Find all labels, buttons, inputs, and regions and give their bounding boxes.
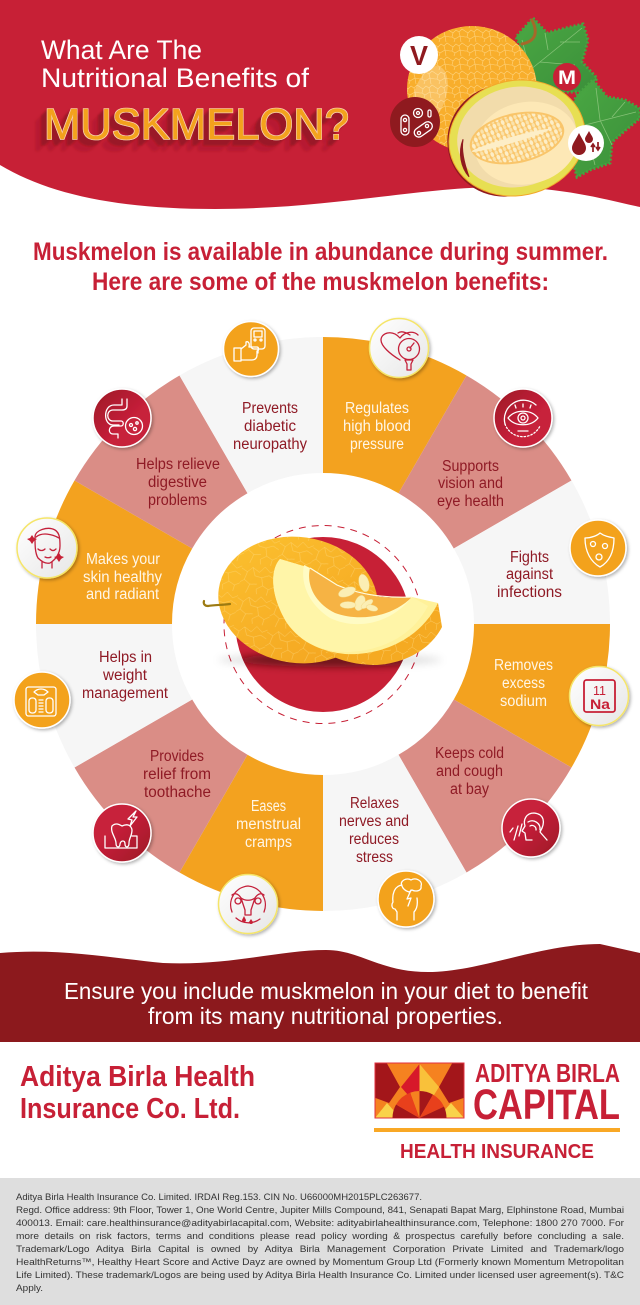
company name: Insurance Co. Ltd. bbox=[20, 1093, 240, 1125]
segment: supports vision and eye health: vision and bbox=[438, 475, 503, 492]
title: MUSKMELON? bbox=[44, 100, 349, 149]
segment: makes your skin healthy and radiant: skin healthy bbox=[83, 569, 162, 586]
cut melon bbox=[436, 67, 597, 209]
segment: helps in weight management: management bbox=[82, 685, 169, 702]
segment: keeps cold and cough at bay: and cough bbox=[436, 763, 503, 780]
closing banner bbox=[0, 944, 640, 1042]
segment: provides relief from toothache bbox=[74, 700, 248, 872]
segment: removes excess sodium: sodium bbox=[500, 693, 547, 710]
segment: makes your skin healthy and radiant: and radiant bbox=[86, 586, 160, 603]
segment: relaxes nerves and reduces stress: stress bbox=[356, 849, 393, 866]
icon: glucose meter bbox=[224, 322, 278, 376]
soft ground shadow outside disc bbox=[218, 654, 442, 666]
segment: eases menstrual cramps: menstrual bbox=[236, 816, 301, 833]
icon: cough bbox=[502, 799, 560, 857]
title: What Are The bbox=[41, 35, 202, 65]
segment: relaxes nerves and reduces stress bbox=[323, 755, 466, 911]
segment: regulates high blood pressure bbox=[323, 337, 466, 493]
legal disclaimer: Life Limited). These trademark/Logos are being used by Aditya Birla Health Insurance Co. Limited under licensed user agreement(s). T&C bbox=[16, 1270, 624, 1281]
segment: helps relieve digestive problems: problems bbox=[148, 492, 207, 509]
red disc bbox=[236, 537, 410, 712]
logo mark bbox=[375, 1063, 464, 1118]
icon: sodium: Na bbox=[590, 696, 610, 712]
legal disclaimer: more details on risk factors, terms and conditions please read policy wording & prospectus carefully before concluding a sale. bbox=[16, 1231, 624, 1242]
segment: eases menstrual cramps: Eases bbox=[251, 798, 286, 815]
intro heading: Here are some of the muskmelon benefits: bbox=[92, 268, 549, 296]
segment: eases menstrual cramps: cramps bbox=[245, 834, 292, 851]
benefits wheel bbox=[36, 337, 610, 911]
whole melon bbox=[406, 20, 537, 152]
segment: prevents diabetic neuropathy: diabetic bbox=[244, 418, 296, 435]
segment: helps relieve digestive problems: Helps relieve bbox=[136, 456, 220, 473]
icon: stressed head bbox=[378, 871, 434, 927]
segment: eases menstrual cramps bbox=[180, 755, 323, 911]
segment: fights against infections bbox=[454, 480, 610, 624]
segment: prevents diabetic neuropathy: neuropathy bbox=[233, 436, 307, 453]
logo bbox=[374, 1058, 620, 1163]
icon: blood pressure heart bbox=[370, 318, 428, 378]
dashed ring bbox=[224, 526, 422, 724]
leaf: lower bbox=[570, 80, 640, 177]
legal disclaimer: HealthReturns™, Healthy Heart Score and Active Dayz are owned by Momentum Group Ltd (Formerly known Momentum Metropolitan bbox=[16, 1257, 624, 1268]
segment: regulates high blood pressure: pressure bbox=[350, 436, 404, 453]
segment: supports vision and eye health: Supports bbox=[442, 458, 499, 475]
segment: provides relief from toothache: relief from bbox=[143, 766, 211, 783]
icon: sodium bbox=[570, 666, 628, 726]
melon shadow on disc bbox=[235, 653, 435, 667]
segment: makes your skin healthy and radiant: Makes your bbox=[86, 551, 160, 568]
closing banner: from its many nutritional properties. bbox=[148, 1003, 503, 1029]
segment: supports vision and eye health: eye health bbox=[437, 493, 504, 510]
centre melon illustration bbox=[204, 526, 442, 724]
segment: keeps cold and cough at bay bbox=[398, 700, 572, 872]
segment: relaxes nerves and reduces stress: nerves and bbox=[339, 813, 409, 830]
segment: provides relief from toothache: toothache bbox=[144, 784, 211, 801]
icon: weighing scale bbox=[14, 672, 70, 728]
legal disclaimer: Apply. bbox=[16, 1283, 43, 1294]
icon: sodium: 11 bbox=[593, 683, 606, 698]
header red wave bbox=[0, 0, 640, 209]
badge: germs bbox=[390, 97, 440, 147]
title: Nutritional Benefits of bbox=[41, 63, 310, 93]
whole melon bbox=[204, 526, 386, 674]
segment: provides relief from toothache: Provides bbox=[150, 748, 204, 765]
segment: fights against infections: Fights bbox=[510, 549, 549, 566]
segment: makes your skin healthy and radiant bbox=[36, 480, 192, 624]
segment: keeps cold and cough at bay: Keeps cold bbox=[435, 745, 504, 762]
badge: M: M bbox=[558, 68, 576, 89]
segment: regulates high blood pressure: high blood bbox=[343, 418, 411, 435]
segment: removes excess sodium bbox=[454, 624, 610, 768]
icon: shield bbox=[570, 520, 626, 576]
segment: relaxes nerves and reduces stress: reduces bbox=[349, 831, 399, 848]
legal disclaimer: 400013. Email: care.healthinsurance@adityabirlacapital.com, Website: adityabirlahealthinsurance.com, Telephone: 1800 270 7000. For bbox=[16, 1218, 624, 1229]
header melon illustration bbox=[390, 18, 640, 209]
logo: HEALTH INSURANCE bbox=[400, 1140, 594, 1163]
segment: helps in weight management: weight bbox=[102, 667, 148, 684]
legal disclaimer: Regd. Office address: 9th Floor, Tower 1, One World Centre, Jupiter Mills Compound, 841, Senapati Bapat Marg, Elphinstone Road, Mumbai bbox=[16, 1205, 624, 1216]
segment: removes excess sodium: Removes bbox=[494, 657, 553, 674]
segment: fights against infections: infections bbox=[497, 584, 562, 601]
segment: helps in weight management: Helps in bbox=[99, 649, 152, 666]
legal disclaimer bbox=[0, 1178, 640, 1305]
segment: regulates high blood pressure: Regulates bbox=[345, 400, 409, 417]
leaf: upper bbox=[516, 18, 597, 92]
badge: V bbox=[400, 36, 438, 74]
badge: V: V bbox=[410, 40, 428, 71]
badge: M bbox=[553, 63, 581, 91]
segment: fights against infections: against bbox=[506, 566, 554, 583]
legal disclaimer: Trademark/Logo Aditya Birla Capital is owned by Aditya Birla Management Corporation Private Limited and Trademark/logo bbox=[16, 1244, 624, 1255]
title bbox=[41, 35, 349, 149]
segment: prevents diabetic neuropathy bbox=[180, 337, 323, 493]
seeds bbox=[337, 573, 379, 612]
segment: keeps cold and cough at bay: at bay bbox=[450, 781, 489, 798]
icon: tooth bbox=[93, 804, 151, 862]
icon: intestine bbox=[93, 389, 151, 447]
segment: helps relieve digestive problems bbox=[74, 376, 248, 548]
segment: removes excess sodium: excess bbox=[502, 675, 545, 692]
icon: menstrual cramps bbox=[218, 874, 278, 934]
segment: helps in weight management bbox=[36, 624, 192, 768]
icon: eye bbox=[494, 389, 552, 447]
legal disclaimer: Aditya Birla Health Insurance Co. Limited. IRDAI Reg.153. CIN No. U66000MH2015PLC263677. bbox=[16, 1192, 422, 1203]
company name bbox=[20, 1061, 255, 1125]
segment: prevents diabetic neuropathy: Prevents bbox=[242, 400, 298, 417]
intro heading bbox=[33, 238, 608, 296]
company name: Aditya Birla Health bbox=[20, 1061, 255, 1093]
melon slice bbox=[273, 559, 442, 665]
segment: supports vision and eye health bbox=[398, 376, 572, 548]
segment: helps relieve digestive problems: digestive bbox=[148, 474, 207, 491]
closing banner: Ensure you include muskmelon in your diet to benefit bbox=[64, 978, 589, 1004]
icon: face skin bbox=[17, 518, 77, 578]
badge: blood bbox=[568, 125, 604, 161]
segment: relaxes nerves and reduces stress: Relaxes bbox=[350, 795, 399, 812]
